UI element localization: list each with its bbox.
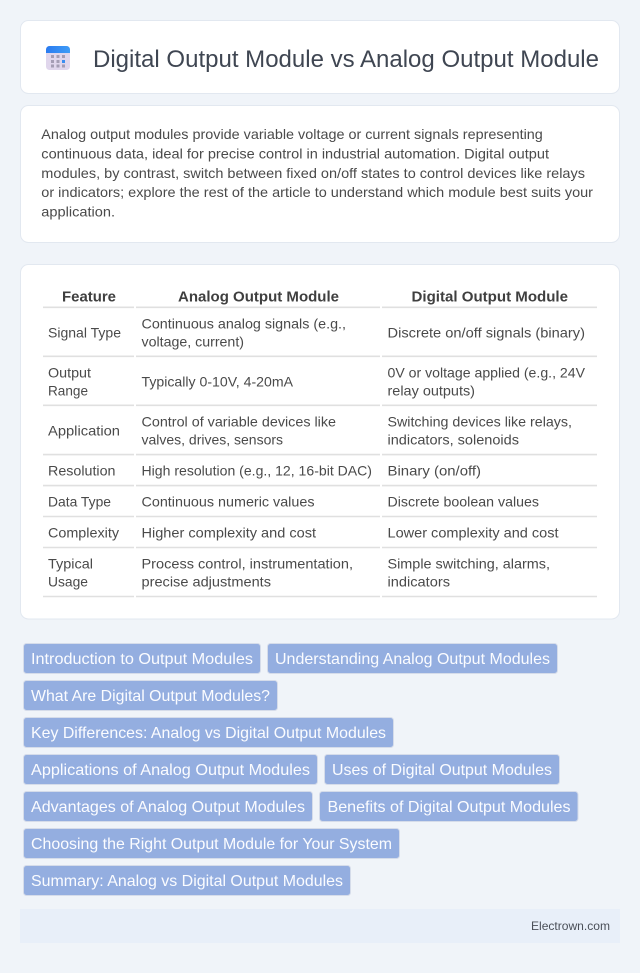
tag list [24, 644, 578, 896]
row: typical usage: indicators [388, 574, 450, 590]
panel: intro paragraph: continuous data, ideal for precise control in industrial automation. Digital output [41, 145, 549, 161]
tag: choosing the right module [24, 828, 400, 858]
title: Digital Output Module vs Analog Output Module [93, 46, 599, 73]
row: signal type: Discrete on/off signals (binary) [388, 324, 585, 340]
tag: benefits of digital [320, 792, 578, 822]
table header row: Feature [62, 290, 116, 306]
row: application: Application [48, 423, 120, 439]
row: application: Control of variable devices like [142, 414, 336, 430]
row: typical usage: precise adjustments [142, 574, 271, 590]
panel: comparison table [20, 264, 620, 619]
tag: advantages of analog [24, 792, 312, 822]
row: application: indicators, solenoids [388, 432, 519, 448]
tag: advantages of analog: Advantages of Analog Output Modules [31, 799, 305, 816]
row: resolution [48, 463, 481, 479]
table header row: Digital Output Module [412, 290, 568, 306]
row: output range [48, 365, 586, 398]
tag: understanding analog [268, 644, 558, 674]
tag: uses of digital: Uses of Digital Output Modules [332, 762, 552, 779]
panel: intro paragraph: or indicators; explore the rest of the article to understand which module best suits your [41, 184, 593, 200]
tag: what are digital [24, 680, 278, 710]
tag: applications of analog [24, 754, 318, 784]
panel: intro paragraph: Analog output modules provide variable voltage or current signals representing [41, 126, 543, 142]
row: resolution: High resolution (e.g., 12, 16-bit DAC) [142, 463, 372, 479]
row: data type: Discrete boolean values [388, 494, 539, 510]
row: typical usage: Simple switching, alarms, [388, 556, 550, 572]
panel: intro paragraph: application. [41, 204, 115, 220]
row: complexity: Complexity [48, 525, 119, 541]
tag: introduction: Introduction to Output Modules [31, 651, 253, 668]
row: output range: 0V or voltage applied (e.g., 24V [388, 365, 586, 381]
row: typical usage [48, 556, 550, 590]
row: resolution: Resolution [48, 463, 116, 479]
tag: benefits of digital: Benefits of Digital Output Modules [328, 799, 570, 816]
row: application: valves, drives, sensors [142, 432, 283, 448]
panel: intro paragraph [20, 106, 620, 242]
row: typical usage: Usage [48, 574, 88, 590]
tag: introduction [24, 644, 260, 674]
tag: what are digital: What Are Digital Output Modules? [31, 688, 270, 705]
tag: summary [24, 866, 350, 896]
row: typical usage: Process control, instrumentation, [142, 556, 353, 572]
row: data type: Continuous numeric values [142, 494, 314, 510]
row: application [48, 414, 572, 448]
row: output range: relay outputs) [388, 382, 475, 398]
row: complexity [48, 525, 559, 541]
footer bar [20, 909, 620, 943]
row: typical usage: Typical [48, 556, 93, 572]
row: application: Switching devices like relays, [388, 414, 572, 430]
row: output range: Range [48, 382, 88, 398]
row: signal type: voltage, current) [142, 334, 244, 350]
row: resolution: Binary (on/off) [388, 463, 481, 479]
tag: key differences: Key Differences: Analog vs Digital Output Modules [31, 725, 386, 742]
row: complexity: Higher complexity and cost [142, 525, 316, 541]
row: output range: Output [48, 365, 91, 381]
row: signal type: Signal Type [48, 324, 121, 340]
row: output range: Typically 0-10V, 4-20mA [142, 374, 294, 390]
tag: uses of digital [324, 754, 560, 784]
tag: understanding analog: Understanding Analog Output Modules [275, 651, 550, 668]
tag: summary: Summary: Analog vs Digital Output Modules [31, 873, 343, 890]
tag: key differences [24, 718, 394, 748]
table header row [62, 290, 568, 306]
icon: calendar grid [46, 46, 70, 70]
row: complexity: Lower complexity and cost [388, 525, 559, 541]
row: data type: Data Type [48, 494, 111, 510]
tag: choosing the right module: Choosing the Right Output Module for Your System [31, 836, 392, 853]
footer credit: Electrown.com [531, 919, 610, 933]
tag: applications of analog: Applications of Analog Output Modules [31, 762, 310, 779]
panel: intro paragraph: modules, by contrast, switch between fixed on/off states to control devices like relays [41, 165, 585, 181]
row: signal type: Continuous analog signals (e.g., [142, 316, 346, 332]
row: data type [48, 494, 539, 510]
header card [20, 20, 620, 94]
table header row: Analog Output Module [178, 290, 339, 306]
row: signal type [48, 316, 585, 350]
